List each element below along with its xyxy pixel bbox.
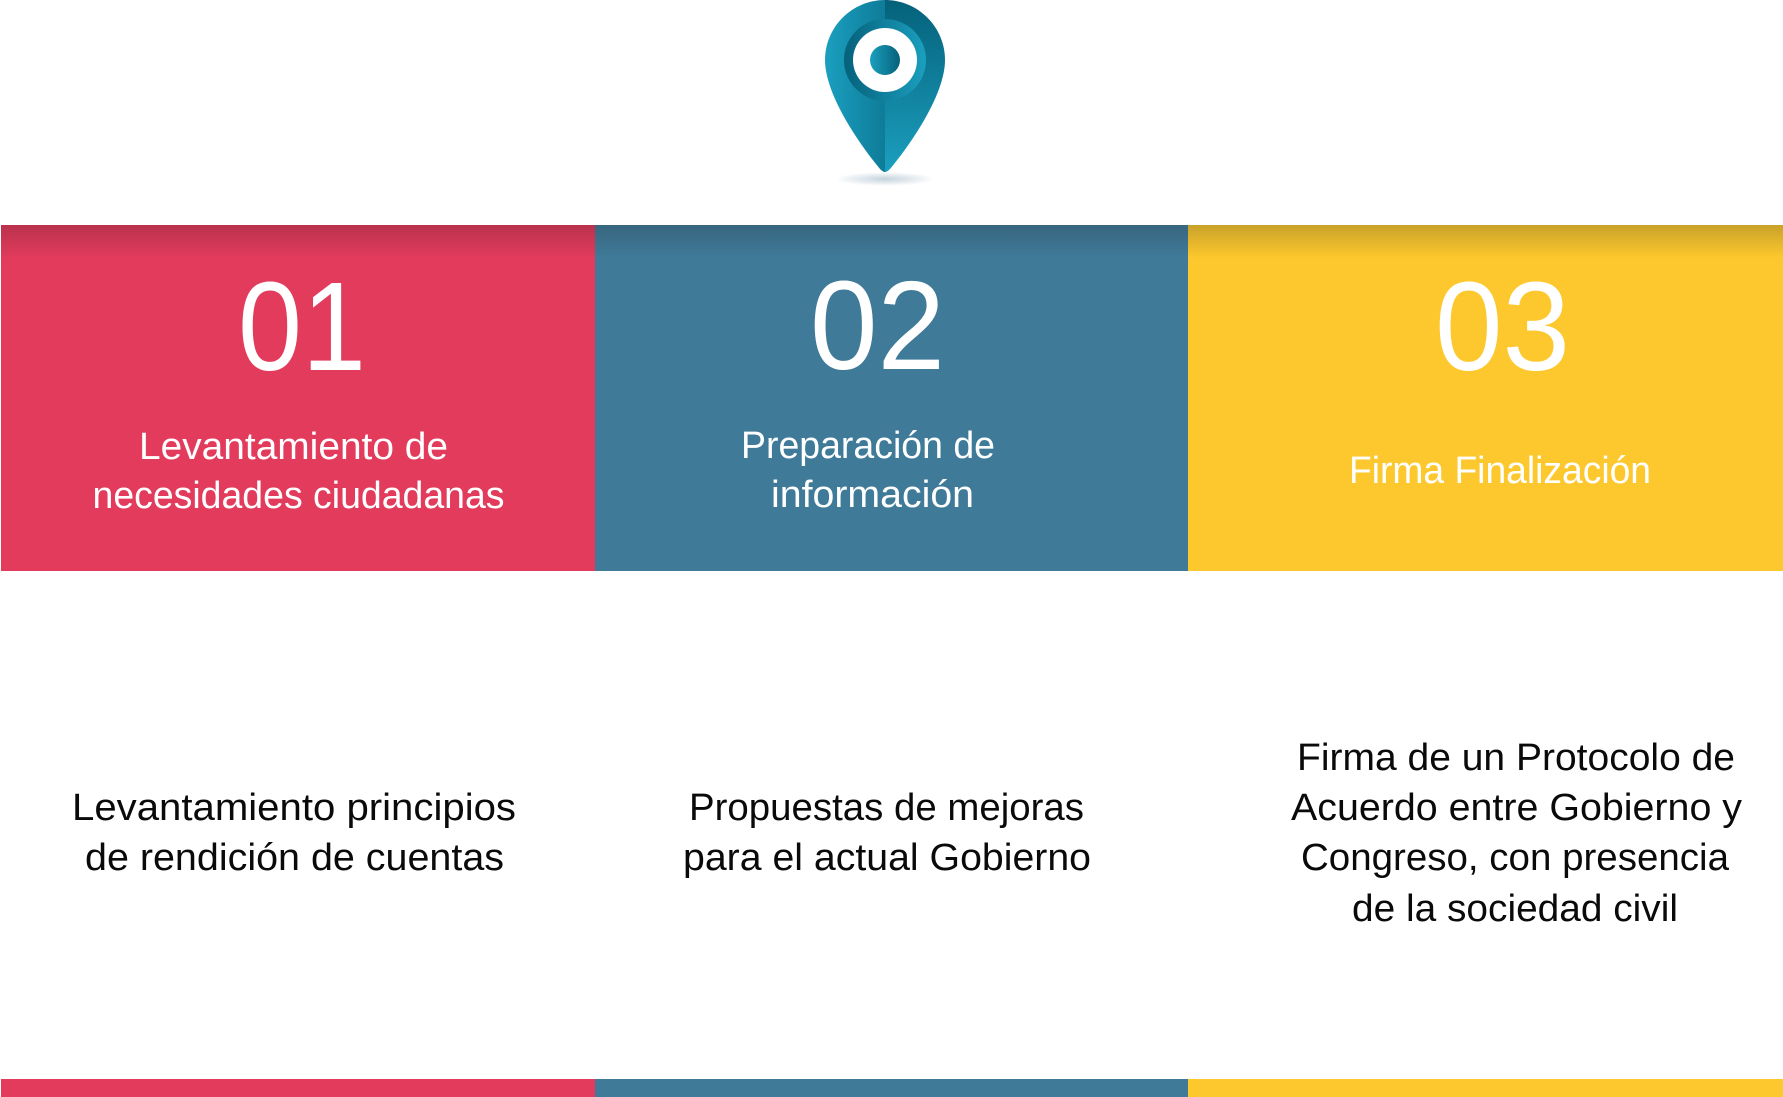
bottom color bar [1,1079,1783,1097]
heading: step 02: información [771,474,974,516]
text block: step 03 description: de la sociedad civil [1352,888,1678,930]
text block: step 02 description: Propuestas de mejoras [689,787,1084,829]
text block: step 01 description: de rendición de cuentas [85,837,504,879]
panel: step 01 [1,225,595,571]
heading: step 02 [741,425,995,516]
text block: step 03 description: Congreso, con presencia [1301,837,1730,879]
text block: step 03 description [1291,737,1742,930]
heading: step 01: Levantamiento de [139,426,448,468]
number 02: 02 [810,255,945,396]
panel: step 02 [595,225,1188,571]
heading: step 02: Preparación de [741,425,995,467]
text block: step 01 description [72,787,516,879]
number 01: 01 [238,256,366,397]
text block: step 02 description: para el actual Gobierno [683,837,1091,879]
text block: step 03 description: Acuerdo entre Gobierno y [1291,787,1742,829]
text block: step 03 description: Firma de un Protocolo de [1297,737,1735,779]
heading: step 01: necesidades ciudadanas [92,475,504,517]
text block: step 02 description [683,787,1091,879]
panel: step 03 [1188,225,1783,571]
heading: step 01 [92,426,504,517]
heading: step 03: Firma Finalización [1349,450,1651,492]
number 03: 03 [1435,256,1570,397]
text block: step 01 description: Levantamiento principios [72,787,516,829]
icon: location pin [825,0,945,186]
